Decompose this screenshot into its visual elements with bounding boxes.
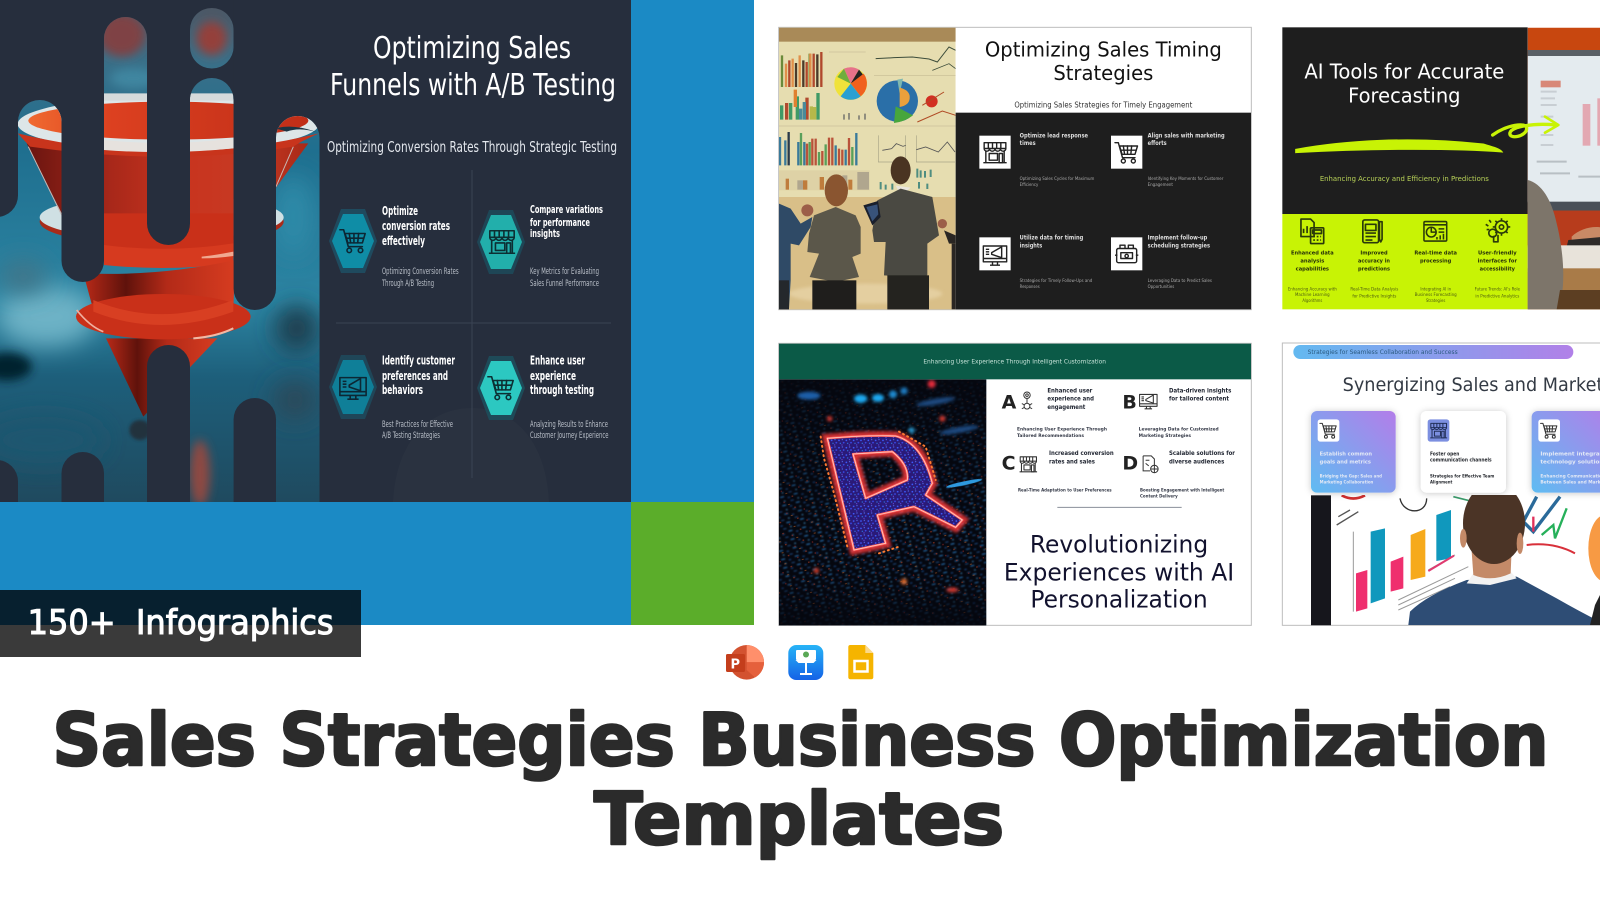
faint arch decoration: [393, 408, 549, 502]
item: enhance user experience: experience: [530, 369, 576, 383]
slide title: [1004, 531, 1234, 613]
capsule stripes: [0, 30, 276, 502]
header text: Enhancing User Experience Through Intelligent Customization: [923, 359, 1106, 366]
slide title: Revolutionizing: [1030, 531, 1208, 559]
badge: 150+ Infographics: [0, 590, 361, 657]
card: foster open communication: [1421, 411, 1506, 493]
feature headings: accessibility: [1480, 267, 1515, 273]
icon: PowerPoint: P: [730, 658, 740, 672]
item: optimize conversion rates: [329, 204, 459, 289]
brush stroke: [1296, 140, 1502, 153]
item descriptions: Responses: [1020, 284, 1040, 290]
main title: [52, 698, 1548, 861]
item: identify customer preferences: Identify customer: [382, 354, 455, 368]
slide title: Personalization: [1030, 585, 1208, 613]
card: establish common goals: goals and metrics: [1320, 459, 1372, 465]
item descriptions: Leveraging Data to Predict Sales: [1148, 278, 1213, 284]
item: enhance user experience: Analyzing Results to Enhance: [530, 420, 608, 430]
item headings: Scalable solutions for: [1169, 450, 1236, 457]
feature descriptions: Future Trends: AI's Role: [1475, 287, 1520, 293]
icon: Google Slides: [848, 645, 873, 679]
feature headings: User-friendly: [1478, 251, 1517, 257]
slide subtitle: Enhancing Accuracy and Efficiency in Predictions: [1320, 174, 1489, 183]
item: identify customer preferences: Best Practices for Effective: [382, 420, 453, 430]
image: neon letter R: [779, 379, 986, 626]
header band: [779, 344, 1251, 379]
item descriptions: Opportunities: [1148, 284, 1175, 290]
item descriptions: Boosting Engagement with Intelligent: [1140, 488, 1225, 494]
slide title: Optimizing Sales Timing: [985, 38, 1222, 62]
lower cone: [106, 338, 217, 417]
slide: Optimizing Sales Timing Strategies: [779, 27, 1251, 310]
card: foster open communication: communication channels: [1430, 457, 1492, 463]
item headings: [1020, 132, 1225, 249]
item: compare variations: Sales Funnel Performance: [530, 279, 599, 289]
icon: Keynote: [788, 645, 823, 680]
item headings: insights: [1020, 242, 1043, 249]
feature descriptions: Integrating AI in: [1420, 286, 1451, 292]
feature descriptions: [1288, 286, 1520, 304]
item: compare variations: insights: [530, 227, 560, 240]
item: compare variations: Compare variations: [530, 203, 603, 216]
item headings: Enhanced user: [1047, 387, 1093, 394]
item descriptions: [1020, 176, 1224, 290]
feature headings: processing: [1420, 259, 1451, 265]
card: foster open communication: Strategies for Effective Team: [1430, 473, 1495, 479]
feature descriptions: Algorithms: [1302, 298, 1323, 304]
card: establish common goals: Bridging the Gap: Sales and: [1320, 473, 1382, 479]
photo: team studying charts: [779, 28, 956, 310]
hero title: Funnels with A/B Testing: [330, 68, 616, 103]
pill banner: [1293, 345, 1573, 359]
item: optimize conversion rates: conversion rates: [382, 219, 450, 233]
feature headings: Improved: [1360, 251, 1388, 257]
item: optimize conversion rates: Through A/B Testing: [381, 279, 434, 289]
slide title: Strategies: [1053, 61, 1153, 85]
letters: D: [1122, 452, 1138, 474]
feature headings: accuracy in: [1358, 259, 1390, 265]
pie chart small: [834, 67, 867, 100]
chart bars row 2: [782, 90, 818, 120]
letters: [1002, 391, 1138, 474]
item headings: times: [1020, 140, 1036, 147]
main title: Templates: [594, 777, 1004, 861]
item descriptions: Leveraging Data for Customized: [1139, 426, 1219, 432]
slide title: [985, 38, 1222, 85]
item headings: diverse audiences: [1169, 458, 1225, 465]
feature descriptions: for Predictive Insights: [1352, 294, 1397, 300]
item descriptions: Optimizing Sales Cycles for Maximum: [1020, 176, 1094, 182]
item: compare variations: for performance: [530, 216, 590, 229]
item: identify customer preferences: A/B Testing Strategies: [382, 431, 440, 441]
icon row: supported apps: [726, 645, 873, 680]
item: identify customer preferences: preferences and: [382, 369, 448, 383]
slide title: AI Tools for Accurate: [1304, 59, 1504, 83]
item: identify customer preferences: [329, 354, 455, 441]
item descriptions: Tailored Recommendations: [1017, 433, 1084, 439]
item descriptions: Real-Time Adaptation to User Preferences: [1018, 488, 1112, 494]
card: implement integrated technology: [1532, 411, 1600, 493]
people: [779, 204, 812, 309]
item descriptions: Enhancing User Experience Through: [1017, 426, 1107, 432]
chart row 4: [779, 170, 870, 190]
item headings: Utilize data for timing: [1020, 234, 1083, 241]
hero title: [330, 31, 616, 103]
slide: AI Tools for Accurate Forecasting: [1282, 27, 1600, 310]
small right charts: [881, 169, 931, 190]
feature descriptions: Real-Time Data Analysis: [1350, 287, 1399, 293]
panel: dark hero slide: [0, 0, 631, 502]
feature headings: [1291, 251, 1517, 273]
slide subtitle: Optimizing Sales Strategies for Timely Engagement: [1014, 100, 1192, 109]
item headings: engagement: [1047, 404, 1085, 411]
feature descriptions: Enhancing Accuracy with: [1288, 286, 1337, 292]
grid dividers: [336, 170, 611, 478]
item descriptions: Content Delivery: [1140, 494, 1178, 500]
feature headings: capabilities: [1296, 267, 1330, 273]
item headings: Increased conversion: [1049, 450, 1114, 457]
item descriptions: Strategies for Timely Follow-Ups and: [1020, 278, 1093, 284]
feature descriptions: Strategies: [1426, 298, 1446, 304]
feature descriptions: Machine Learning: [1295, 292, 1330, 298]
blurred backdrop: [98, 13, 145, 57]
card: establish common goals: Establish common: [1320, 451, 1372, 457]
item descriptions: Engagement: [1148, 182, 1173, 188]
item: enhance user experience: Customer Journey Experience: [530, 431, 608, 441]
item: compare variations: [477, 203, 603, 289]
icons: [979, 136, 1142, 270]
feature headings: analysis: [1300, 259, 1325, 265]
slide: Synergizing Sales and Marketing: [1282, 343, 1600, 625]
hero title: Optimizing Sales: [373, 31, 571, 66]
feature headings: Enhanced data: [1291, 251, 1334, 257]
feature headings: interfaces for: [1478, 259, 1517, 265]
chart bars row 1: [782, 52, 821, 87]
item descriptions: Marketing Strategies: [1139, 433, 1191, 439]
feature descriptions: in Predictive Analytics: [1475, 294, 1520, 300]
item: enhance user experience: [477, 354, 608, 441]
item headings: rates and sales: [1049, 458, 1095, 465]
pie chart large: [877, 79, 918, 123]
item descriptions: Efficiency: [1020, 182, 1039, 188]
item headings: Data-driven insights: [1169, 387, 1232, 394]
item descriptions: [1017, 426, 1225, 500]
rim: [18, 97, 319, 151]
card: foster open communication: Alignment: [1430, 479, 1452, 485]
item: compare variations: Key Metrics for Evaluating: [530, 267, 599, 277]
arrow: [1493, 117, 1558, 137]
item headings: [1047, 387, 1236, 465]
pill text: Strategies for Seamless Collaboration and Success: [1308, 349, 1458, 356]
icons: [1301, 218, 1510, 244]
slide title: Forecasting: [1348, 84, 1460, 108]
item: identify customer preferences: behaviors: [382, 383, 423, 397]
item headings: Align sales with marketing: [1148, 132, 1225, 139]
icon: PowerPoint: [726, 645, 764, 680]
item headings: Optimize lead response: [1020, 132, 1088, 139]
upper cone: [27, 143, 308, 257]
dark content block: [956, 113, 1251, 309]
item icons: [1020, 392, 1158, 473]
letters: A: [1002, 391, 1017, 413]
item headings: for tailored content: [1169, 396, 1229, 403]
item headings: scheduling strategies: [1148, 242, 1210, 249]
item descriptions: Identifying Key Moments for Customer: [1148, 176, 1224, 182]
badge: 150+ Infographics: 150+ Infographics: [28, 603, 334, 643]
feature descriptions: Business Forecasting: [1415, 292, 1457, 298]
slide title: [1304, 59, 1504, 108]
item headings: experience and: [1047, 396, 1094, 403]
item: optimize conversion rates: Optimizing Conversion Rates: [382, 267, 459, 277]
letters: B: [1122, 391, 1137, 413]
letters: C: [1002, 452, 1016, 474]
slide title: Experiences with AI: [1004, 558, 1234, 586]
feature headings: predictions: [1358, 267, 1391, 273]
card: foster open communication: Foster open: [1430, 452, 1460, 458]
hero subtitle: Optimizing Conversion Rates Through Strategic Testing: [327, 138, 617, 156]
card: establish common goals: Marketing Collaboration: [1320, 479, 1373, 485]
item headings: Implement follow-up: [1148, 234, 1208, 241]
item: optimize conversion rates: effectively: [382, 234, 425, 248]
feature headings: Real-time data: [1414, 251, 1457, 257]
slide: Revolutionizing Experiences with AI Personalization: [779, 343, 1251, 626]
item: optimize conversion rates: Optimize: [382, 204, 418, 218]
main title: Sales Strategies Business Optimization: [52, 698, 1548, 782]
photo: analyst at screen: [1528, 28, 1600, 310]
hero banner: blue and green blocks: [0, 0, 754, 625]
photo: man at whiteboard: [1311, 483, 1600, 625]
flange: [76, 294, 251, 339]
image: red funnel in capsule mask: [0, 8, 320, 502]
item: enhance user experience: Enhance user: [530, 354, 585, 368]
item: enhance user experience: through testing: [530, 383, 594, 397]
lower body: [86, 260, 234, 304]
card: establish common goals: [1311, 411, 1396, 493]
chart bars row 3: [780, 132, 856, 165]
funnel collar: [40, 219, 284, 236]
item headings: efforts: [1148, 140, 1167, 147]
